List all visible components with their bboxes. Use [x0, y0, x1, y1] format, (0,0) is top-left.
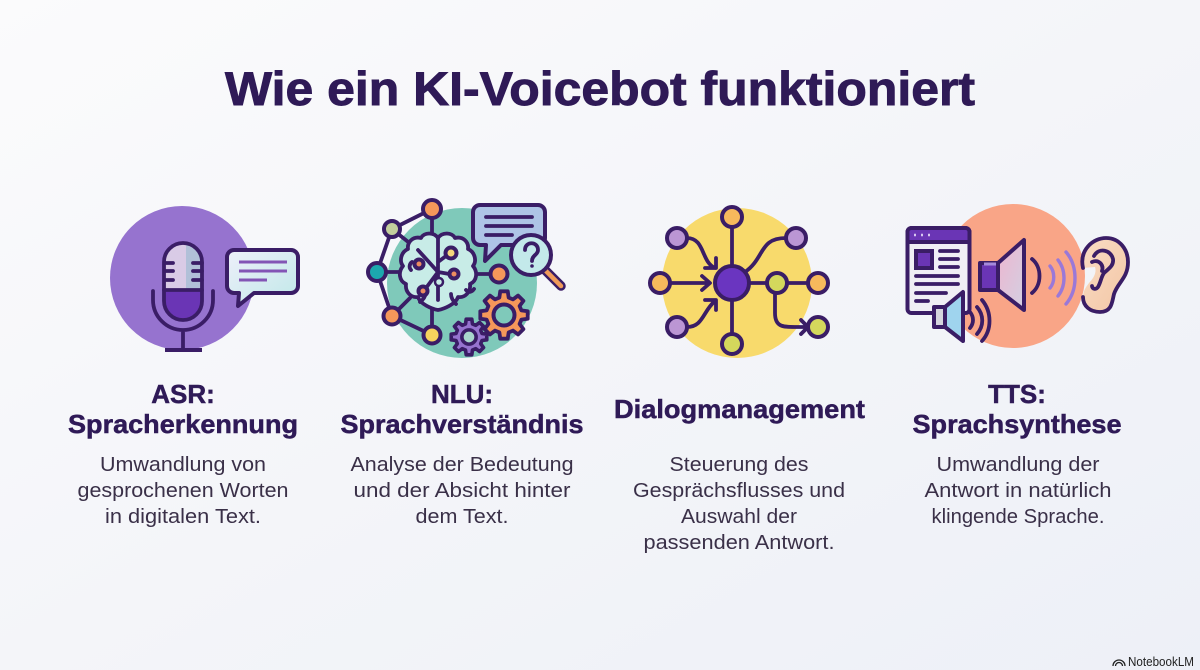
icon: brain network with gears: [368, 200, 561, 358]
text: Dialogmanagement description: passenden Antwort.: [644, 532, 834, 554]
text: ASR description: gesprochenen Worten: [78, 480, 288, 502]
text: TTS description: Umwandlung der: [936, 454, 1100, 476]
icon: microphone with speech bubble: [110, 206, 298, 350]
text: Dialogmanagement description: Auswahl der: [681, 506, 797, 528]
text: TTS description: [924, 454, 1112, 528]
panel: ASR: [68, 206, 298, 528]
text: Dialogmanagement description: Steuerung des: [670, 454, 808, 476]
text: ASR description: [78, 454, 288, 528]
text: TTS description: klingende Sprache.: [932, 506, 1104, 528]
panel: NLU: [340, 200, 584, 528]
panel: Dialogmanagement: [614, 207, 865, 554]
heading: ASR: ASR:: [151, 379, 215, 409]
heading: NLU: [340, 379, 584, 439]
heading: TTS: TTS:: [988, 379, 1046, 409]
heading: Dialogmanagement: Dialogmanagement: [614, 394, 865, 424]
panel: TTS: [908, 204, 1128, 528]
icon: dialog flow network: [650, 207, 828, 358]
heading: ASR: [68, 379, 298, 439]
heading: ASR: Spracherkennung: [68, 409, 298, 439]
heading: TTS: Sprachsynthese: [912, 409, 1122, 439]
text: Dialogmanagement description: [633, 454, 845, 554]
text: TTS description: Antwort in natürlich: [924, 480, 1112, 502]
title: Wie ein KI-Voicebot funktioniert: [225, 62, 975, 115]
icon: document, speakers and ear: [908, 204, 1128, 348]
text: NLU description: und der Absicht hinter: [354, 480, 571, 502]
heading: TTS: [912, 379, 1122, 439]
text: ASR description: in digitalen Text.: [105, 506, 261, 528]
watermark: NotebookLM: NotebookLM: [1128, 655, 1194, 669]
text: NLU description: Analyse der Bedeutung: [350, 454, 574, 476]
icon: purple gear: [451, 319, 487, 355]
icon: orange gear: [480, 291, 528, 339]
text: Dialogmanagement description: Gesprächsflusses und: [633, 480, 845, 502]
text: ASR description: Umwandlung von: [100, 454, 266, 476]
heading: NLU: NLU:: [431, 379, 493, 409]
heading: NLU: Sprachverständnis: [340, 409, 584, 439]
text: NLU description: dem Text.: [416, 506, 508, 528]
text: NLU description: [350, 454, 574, 528]
